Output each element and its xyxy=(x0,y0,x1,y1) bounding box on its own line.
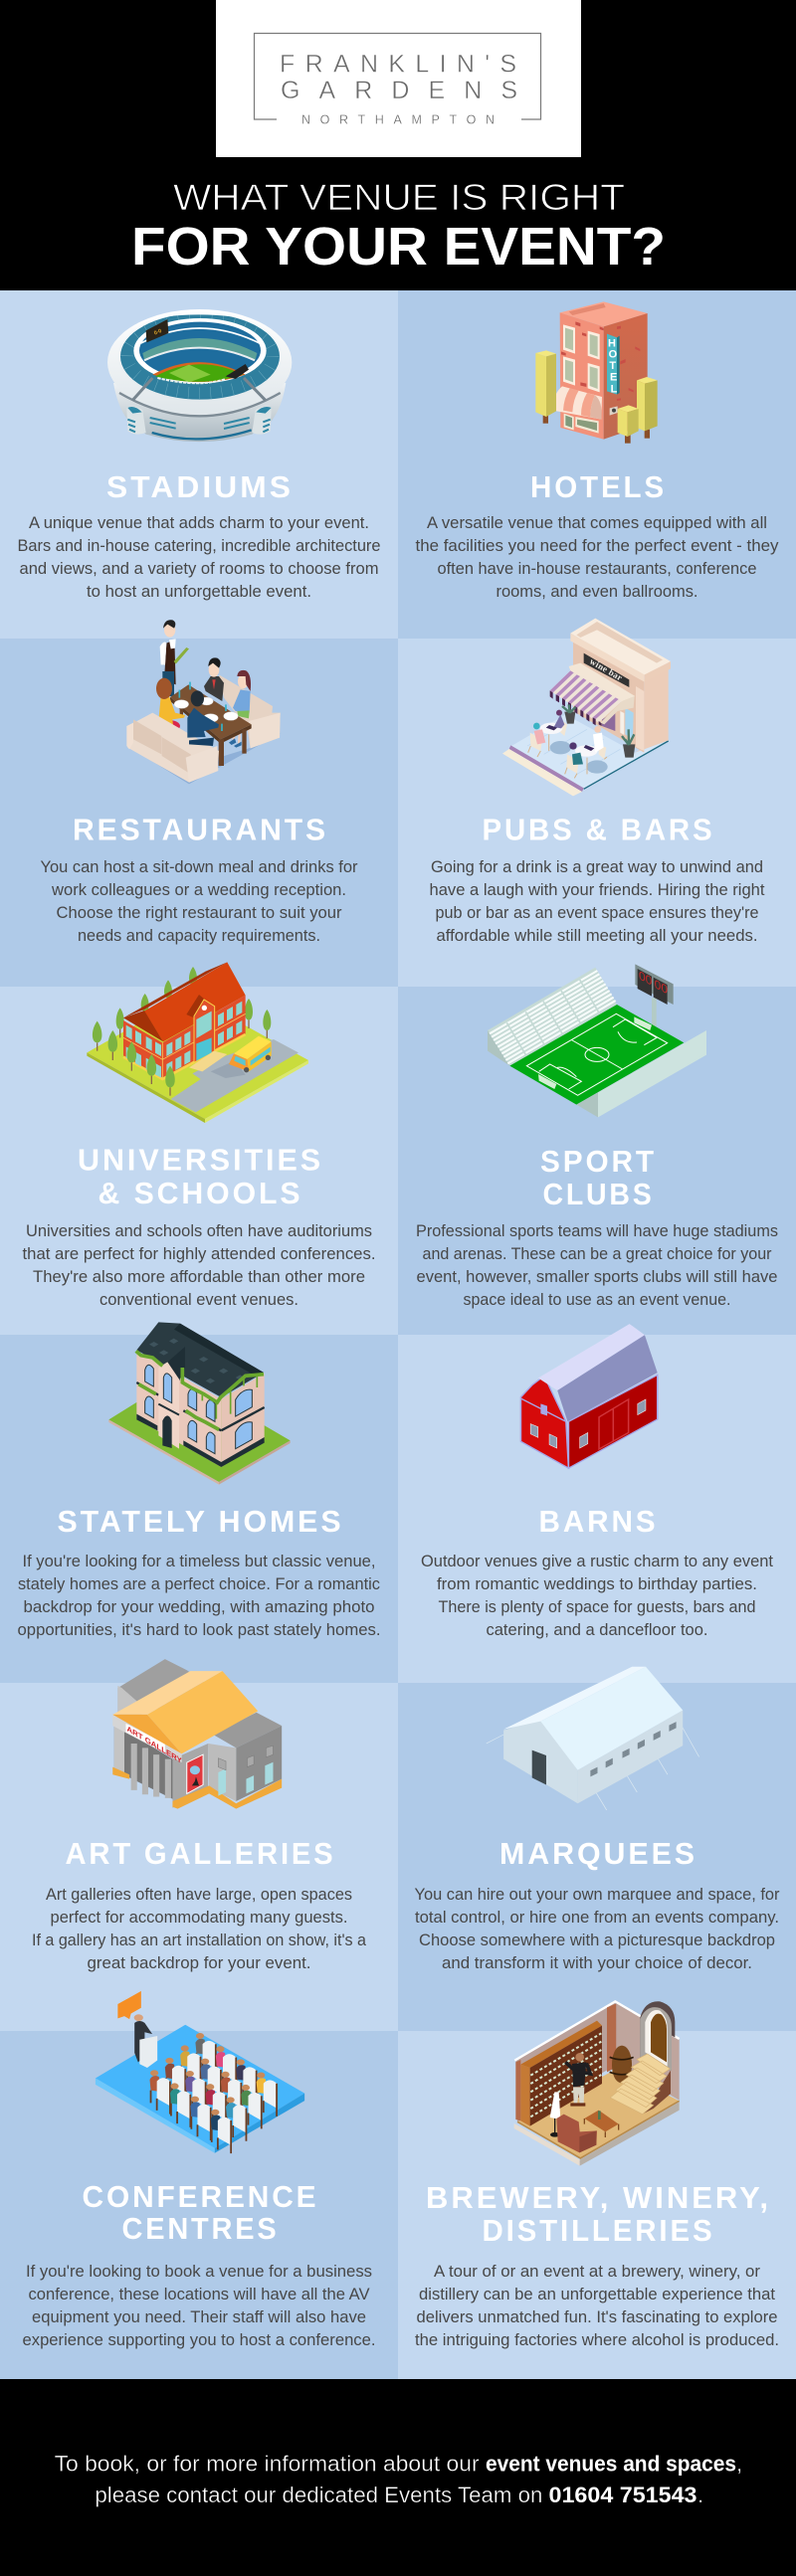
text block: restaurants: Choose the right restaurant to suit your xyxy=(56,903,342,922)
text block: barns: Outdoor venues give a rustic charm to any event xyxy=(421,1552,773,1570)
text block: restaurants: work colleagues or a wedding reception. xyxy=(51,880,346,899)
text block: stadiums: A unique venue that adds charm to your event. xyxy=(29,513,369,532)
heading: sport clubs: SPORT xyxy=(540,1144,657,1179)
icon: school xyxy=(87,962,308,1123)
heading: brewery, winery, distilleries: DISTILLERIES xyxy=(482,2213,714,2248)
text block: pubs and bars: pub or bar as an event space ensures they're xyxy=(436,903,758,922)
text block: conference centres: conference, these locations will have all the AV xyxy=(28,2285,370,2303)
text block: pubs and bars: Going for a drink is a great way to unwind and xyxy=(431,857,763,876)
text block: brewery, winery, distilleries: delivers unmatched fun. It's fascinating to explore xyxy=(416,2307,778,2326)
text block: marquees: Choose somewhere with a picturesque backdrop xyxy=(419,1931,775,1949)
text block: stadiums: and views, and a variety of rooms to choose from xyxy=(20,559,378,578)
title xyxy=(131,177,666,276)
text block: art galleries: great backdrop for your event. xyxy=(88,1953,310,1972)
icon: art gallery: ART GALLERY xyxy=(127,1724,182,1765)
icon: wine cellar xyxy=(514,2001,680,2166)
text block: conference centres: If you're looking to book a venue for a business xyxy=(26,2262,372,2281)
icon: stadium xyxy=(107,309,292,442)
text block: hotels: A versatile venue that comes equipped with all xyxy=(427,513,767,532)
text block: pubs and bars: affordable while still meeting all your needs. xyxy=(436,926,758,945)
text block: universities and schools: Universities and schools often have auditoriums xyxy=(26,1221,372,1240)
panel: pubs and bars xyxy=(398,619,796,987)
text block: conference centres xyxy=(22,2262,376,2349)
footer contact xyxy=(0,2379,796,2576)
text block: art galleries xyxy=(32,1885,367,1972)
title: FOR YOUR EVENT? xyxy=(131,217,666,276)
text block: restaurants: You can host a sit-down meal and drinks for xyxy=(40,857,358,876)
icon: art gallery xyxy=(112,1659,282,1809)
text block: pubs and bars: have a laugh with your friends. Hiring the right xyxy=(430,880,765,899)
header band xyxy=(0,0,796,290)
text block: stadiums: to host an unforgettable event. xyxy=(87,582,311,601)
icon: sports pitch xyxy=(488,964,706,1117)
heading: barns: BARNS xyxy=(539,1504,659,1539)
text block: stately homes xyxy=(18,1552,380,1639)
icon: restaurant table xyxy=(126,620,282,784)
text block: universities and schools: conventional event venues. xyxy=(100,1290,298,1309)
text block: art galleries: If a gallery has an art installation on show, it's a xyxy=(32,1931,367,1949)
text block: hotels: rooms, and even ballrooms. xyxy=(496,582,698,601)
text block: universities and schools xyxy=(22,1221,376,1309)
panel: marquees xyxy=(398,1667,796,2031)
text block: hotels: often have in-house restaurants, conference xyxy=(438,559,756,578)
logo: NORTHAMPTON xyxy=(301,113,495,127)
icon: stadium: 0-0 xyxy=(153,328,163,337)
heading: stadiums: STADIUMS xyxy=(106,469,294,504)
icon: red barn xyxy=(520,1324,658,1468)
text block: marquees: and transform it with your choice of decor. xyxy=(442,1953,752,1972)
panel: brewery, winery, distilleries xyxy=(398,2001,796,2379)
icon: wine bar: wine bar xyxy=(588,656,624,683)
panel: sport clubs xyxy=(398,964,796,1335)
heading: art galleries: ART GALLERIES xyxy=(66,1836,336,1871)
heading: brewery, winery, distilleries: BREWERY, WINERY, xyxy=(426,2180,771,2215)
logo: GARDENS xyxy=(281,77,517,104)
text block: universities and schools: that are perfect for highly attended conferences. xyxy=(22,1244,376,1263)
text block: stately homes: backdrop for your wedding, with amazing photo xyxy=(24,1597,374,1616)
text block: barns xyxy=(421,1552,773,1639)
heading: brewery, winery, distilleries xyxy=(426,2180,771,2248)
panel: stadiums xyxy=(0,290,398,639)
footer contact: . xyxy=(697,2483,703,2507)
text block: art galleries: Art galleries often have large, open spaces xyxy=(46,1885,352,1904)
heading: hotels: HOTELS xyxy=(530,469,667,504)
heading: marquees: MARQUEES xyxy=(499,1836,697,1871)
heading: pubs and bars: PUBS & BARS xyxy=(482,812,714,847)
logo: FRANKLIN'S xyxy=(280,51,516,79)
text block: sport clubs: and arenas. These can be a great choice for your xyxy=(422,1244,772,1263)
footer contact: , xyxy=(736,2452,742,2477)
text block: hotels xyxy=(416,513,779,601)
text block: marquees: total control, or hire one from an events company. xyxy=(415,1908,779,1927)
text block: restaurants xyxy=(40,857,358,945)
panel: barns xyxy=(398,1324,796,1683)
panel: restaurants xyxy=(0,620,398,987)
heading: sport clubs xyxy=(540,1144,657,1211)
footer contact: event venues and spaces xyxy=(486,2452,736,2477)
icon: hotel: HOTEL xyxy=(608,337,618,395)
footer contact: To book, or for more information about our xyxy=(55,2452,480,2477)
heading: universities and schools: UNIVERSITIES xyxy=(78,1142,323,1178)
text block: stately homes: stately homes are a perfect choice. For a romantic xyxy=(18,1574,380,1593)
panel: stately homes xyxy=(0,1322,398,1683)
icon: wine bar xyxy=(502,619,671,796)
text block: brewery, winery, distilleries: distillery can be an unforgettable experience that xyxy=(419,2285,775,2303)
text block: sport clubs xyxy=(416,1221,778,1309)
text block: conference centres: experience supporting you to host a conference. xyxy=(22,2330,376,2349)
text block: barns: from romantic weddings to birthday parties. xyxy=(437,1574,757,1593)
heading: sport clubs: CLUBS xyxy=(543,1177,655,1211)
footer contact: 01604 751543 xyxy=(549,2483,696,2507)
text block: brewery, winery, distilleries: A tour of or an event at a brewery, winery, or xyxy=(434,2262,760,2281)
text block: barns: catering, and a dancefloor too. xyxy=(486,1620,708,1639)
heading: universities and schools: & SCHOOLS xyxy=(98,1176,302,1210)
heading: conference centres: CONFERENCE xyxy=(82,2179,318,2214)
heading: universities and schools xyxy=(78,1142,323,1210)
heading: stately homes: STATELY HOMES xyxy=(58,1504,344,1539)
text block: brewery, winery, distilleries xyxy=(415,2262,779,2349)
text block: hotels: the facilities you need for the perfect event - they xyxy=(416,536,779,555)
text block: barns: There is plenty of space for guests, bars and xyxy=(438,1597,756,1616)
icon: sports pitch: 00 xyxy=(639,968,652,989)
icon: stately home xyxy=(108,1322,291,1485)
text block: restaurants: needs and capacity requirements. xyxy=(78,926,320,945)
panel: universities and schools xyxy=(0,962,398,1335)
panel: art galleries xyxy=(0,1659,398,2031)
icon: sports pitch: 00 xyxy=(655,976,668,997)
title: WHAT VENUE IS RIGHT xyxy=(173,177,625,218)
heading: conference centres xyxy=(82,2179,318,2246)
text block: marquees: You can hire out your own marquee and space, for xyxy=(414,1885,780,1904)
text block: pubs and bars xyxy=(430,857,765,945)
text block: sport clubs: space ideal to use as an event venue. xyxy=(464,1290,730,1309)
panel: conference centres xyxy=(0,1991,398,2379)
text block: brewery, winery, distilleries: the intriguing factories where alcohol is produced. xyxy=(415,2330,779,2349)
icon: marquee xyxy=(487,1667,699,1810)
heading: conference centres: CENTRES xyxy=(121,2211,279,2246)
text block: marquees xyxy=(414,1885,780,1972)
text block: universities and schools: They're also more affordable than other more xyxy=(33,1267,365,1286)
text block: sport clubs: Professional sports teams will have huge stadiums xyxy=(416,1221,778,1240)
text block: stadiums xyxy=(18,513,380,601)
text block: stately homes: If you're looking for a timeless but classic venue, xyxy=(22,1552,376,1570)
text block: stately homes: opportunities, it's hard to look past stately homes. xyxy=(18,1620,380,1639)
logo xyxy=(216,0,581,157)
icon: hotel xyxy=(535,301,658,444)
footer contact: please contact our dedicated Events Team on xyxy=(95,2483,542,2507)
text block: conference centres: equipment you need. Their staff will also have xyxy=(32,2307,366,2326)
panel: hotels xyxy=(398,290,796,639)
text block: sport clubs: event, however, smaller sports clubs will still have xyxy=(416,1267,778,1286)
heading: restaurants: RESTAURANTS xyxy=(73,812,328,847)
text block: art galleries: perfect for accommodating many guests. xyxy=(50,1908,348,1927)
text block: stadiums: Bars and in-house catering, incredible architecture xyxy=(18,536,380,555)
icon: conference xyxy=(96,1991,304,2153)
